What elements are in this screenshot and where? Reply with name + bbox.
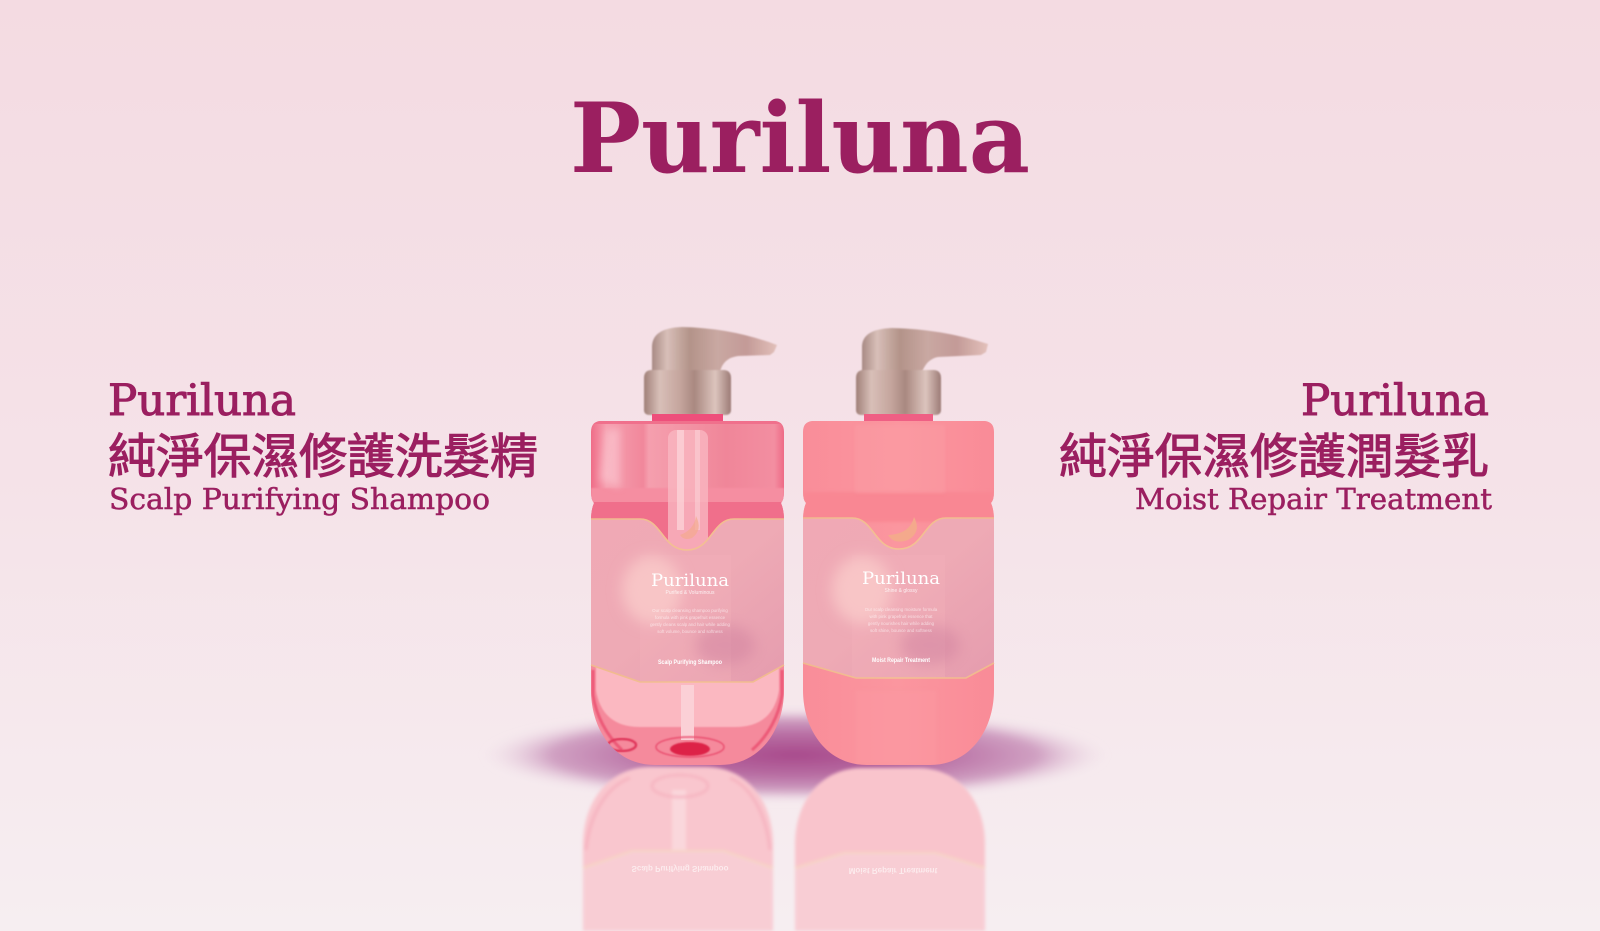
gold line bottom	[591, 665, 784, 682]
label cloud	[622, 556, 682, 624]
bottle contents	[591, 420, 784, 767]
left product name: Puriluna	[108, 376, 296, 426]
label subtitle: Purified & Voluminous	[666, 590, 715, 596]
bottle: moist repair treatment	[803, 328, 994, 766]
gold line top	[591, 519, 784, 550]
label subtitle: Shine & glossy	[884, 588, 918, 594]
label copy: gently nourishes hair while adding	[868, 621, 935, 626]
lower liquid base	[591, 660, 784, 767]
label copy: soft shine, bounce and softness	[870, 628, 933, 633]
title: Puriluna	[570, 82, 1030, 195]
right product name	[1059, 376, 1492, 516]
pump head	[652, 327, 777, 372]
label cloud	[832, 556, 892, 624]
left product name: Scalp Purifying Shampoo	[109, 482, 490, 516]
label copy: gently cleans scalp and hair while adding	[650, 622, 730, 627]
label	[803, 518, 994, 678]
right product name: Moist Repair Treatment	[1135, 482, 1492, 516]
label shading	[695, 625, 755, 665]
label product name: Scalp Purifying Shampoo	[658, 659, 722, 666]
pump collar	[856, 370, 941, 415]
label copy: formula with pink grapefruit essence	[655, 615, 726, 620]
reflection text: treatment: Moist Repair Treatment	[849, 866, 938, 875]
bottle neck	[864, 414, 933, 423]
label	[591, 519, 784, 682]
right product name: 純淨保濕修護潤髮乳	[1059, 431, 1489, 484]
label copy: soft volume, bounce and softness	[657, 629, 724, 634]
label center facet	[640, 555, 731, 681]
gold line bottom	[803, 663, 994, 678]
label center facet	[852, 555, 945, 678]
label product name: Moist Repair Treatment	[872, 657, 931, 664]
grapefruit icon	[888, 517, 917, 542]
label brand: Puriluna	[862, 569, 940, 589]
dip tube	[681, 685, 694, 740]
gold line top	[803, 518, 994, 549]
pale liquid bowl	[596, 660, 779, 727]
bottle contents	[803, 420, 994, 766]
label copy	[865, 607, 938, 633]
grapefruit icon	[680, 516, 699, 539]
inner tube	[668, 430, 708, 550]
pump head	[862, 328, 988, 372]
edge glints	[593, 670, 622, 750]
left product name	[108, 376, 538, 516]
reflection: shampoo bottle	[583, 767, 773, 931]
label brand: Puriluna	[651, 571, 729, 591]
purple floor shadow	[483, 709, 1107, 801]
label copy: Our scalp cleansing moisture formula	[865, 607, 938, 612]
pump collar	[644, 370, 731, 415]
right product name: Puriluna	[1301, 376, 1489, 426]
reflection: treatment bottle	[795, 768, 985, 931]
bottom reflections	[670, 742, 710, 756]
label copy: Our scalp cleansing shampoo purifying	[652, 608, 728, 613]
left product name: 純淨保濕修護洗髮精	[108, 431, 538, 484]
bottle: scalp purifying shampoo	[591, 327, 784, 767]
label copy: with pink grapefruit essence that	[870, 614, 933, 619]
label copy	[650, 608, 730, 634]
reflection text: shampoo: Scalp Purifying Shampoo	[632, 864, 729, 873]
bottle neck	[652, 414, 723, 423]
label shading	[900, 625, 960, 665]
